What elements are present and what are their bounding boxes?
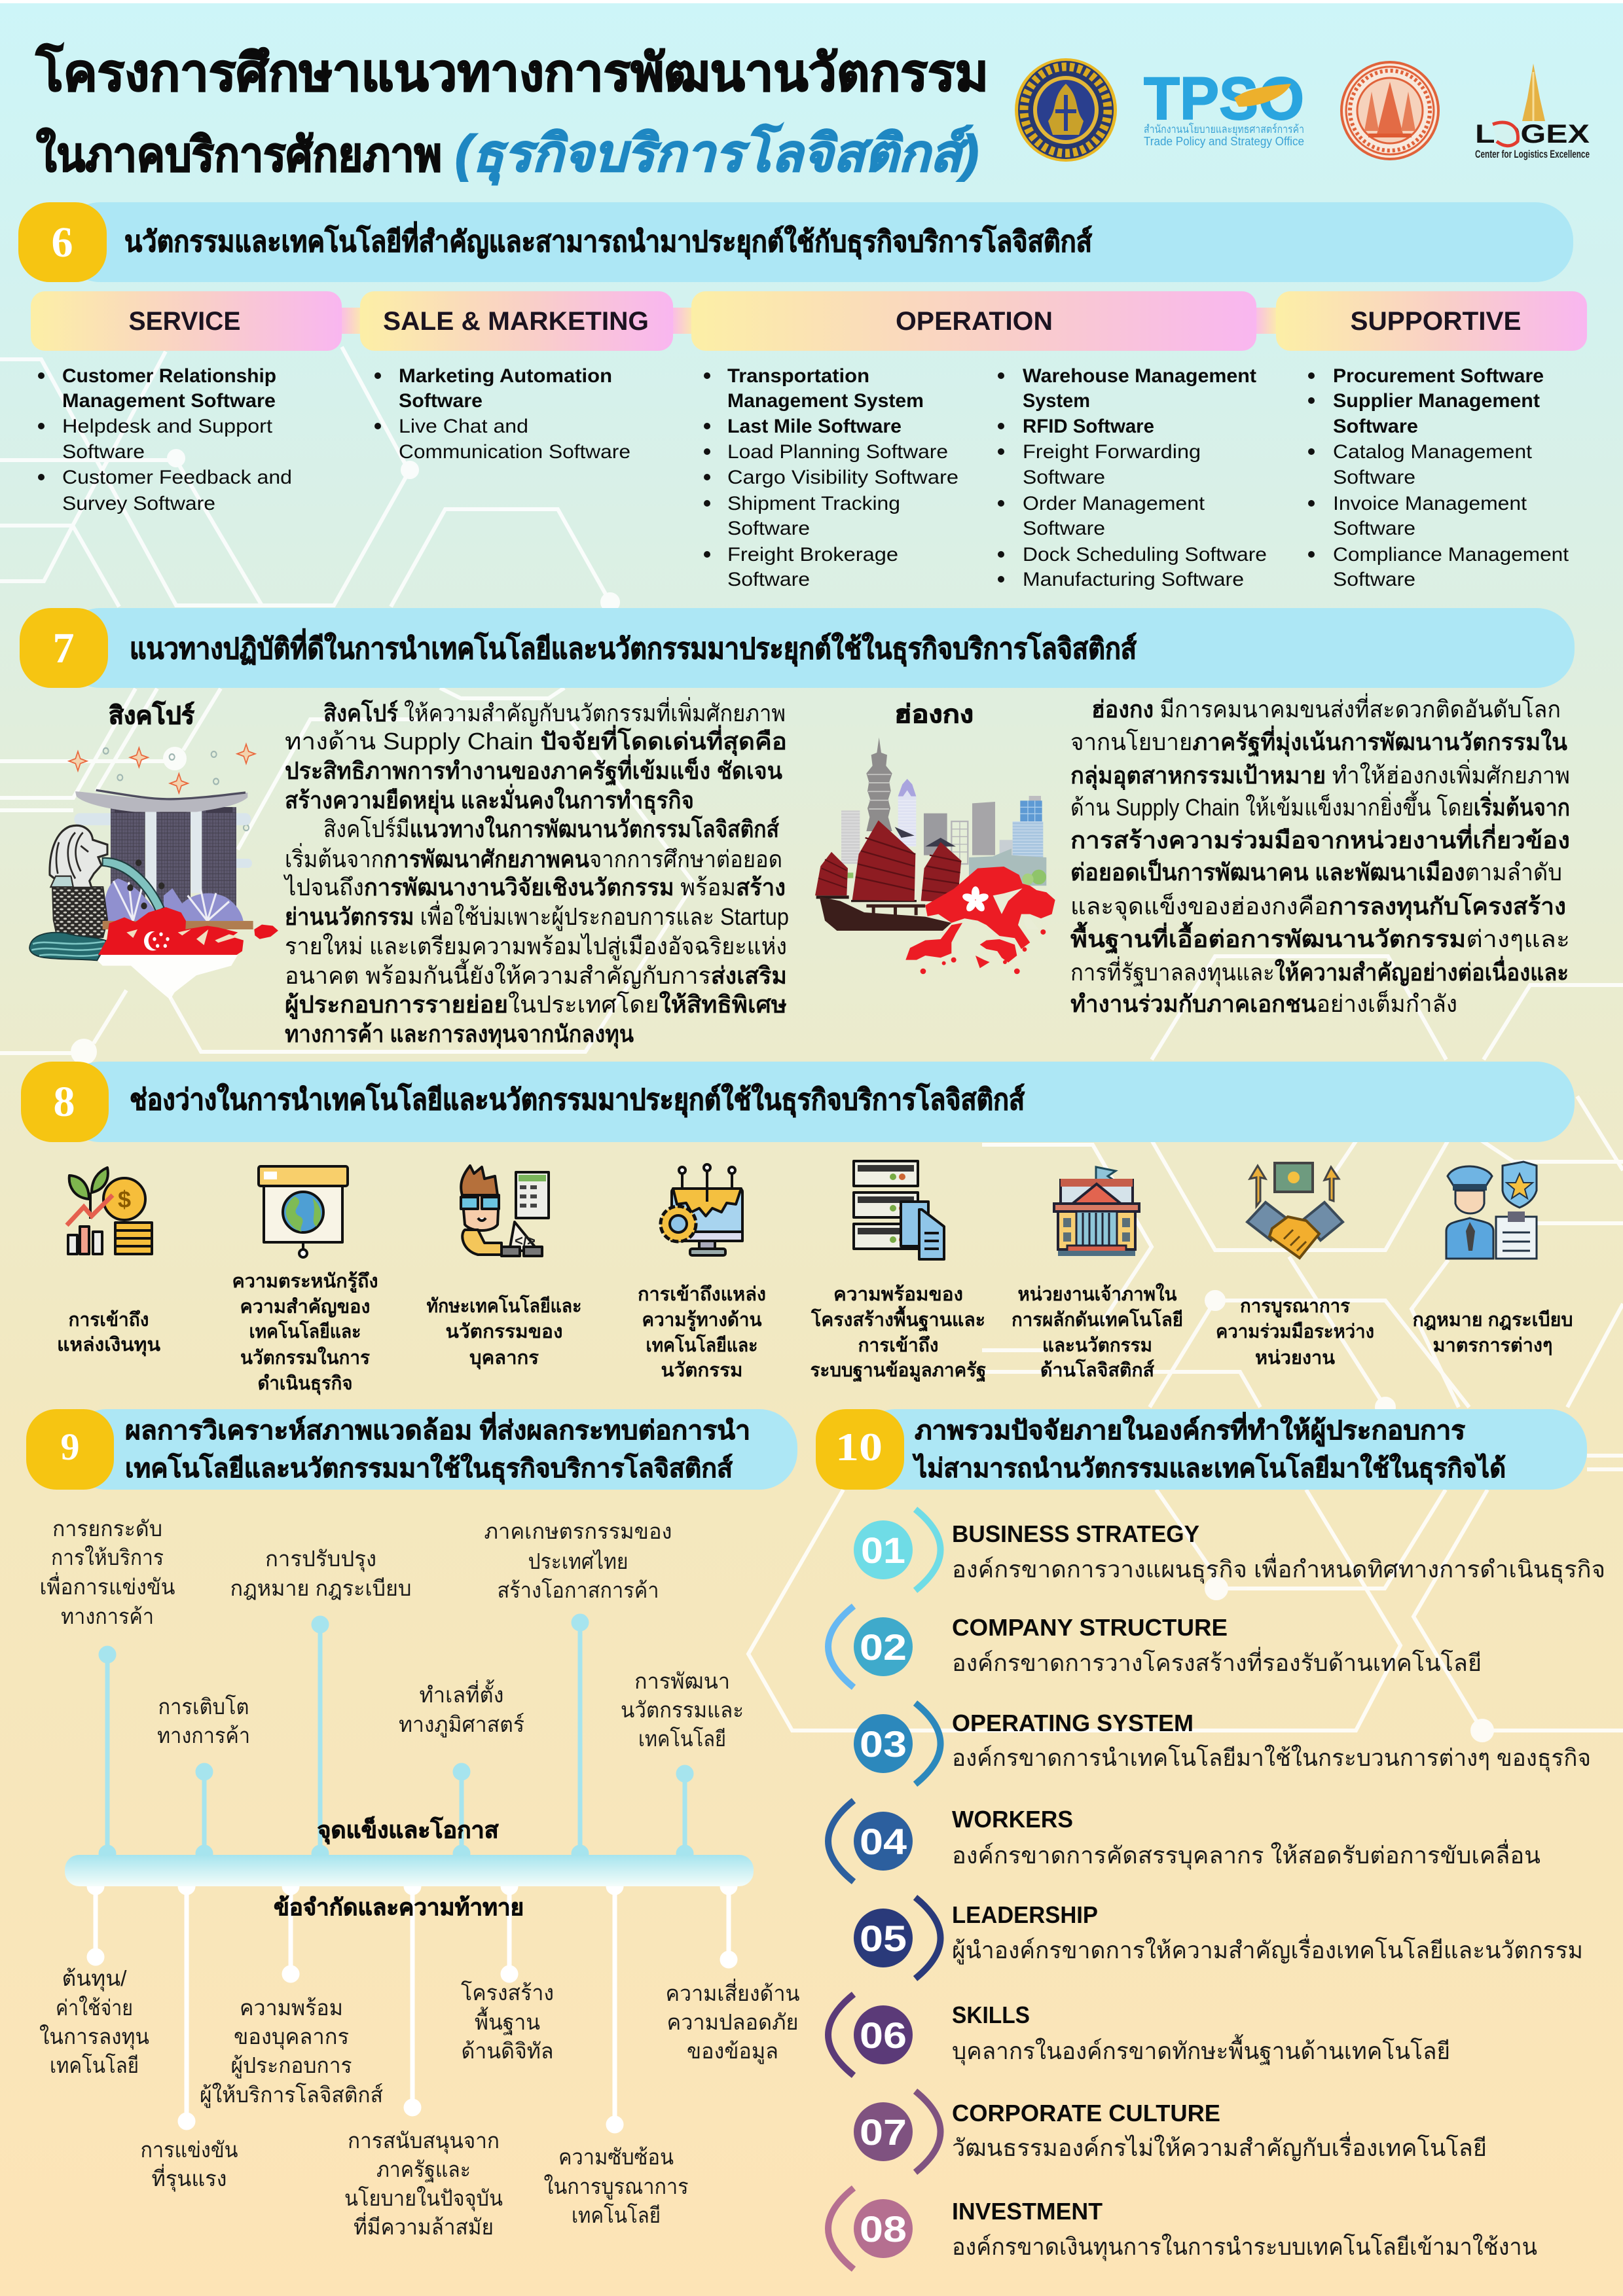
labels: limits and challenges: ความปลอดภัย [666,2010,799,2034]
list: operation software column 1: Management System [727,390,924,412]
label: regulation: กฎหมาย กฎระเบียบ [1413,1310,1573,1331]
logo: LOGEX [1475,63,1590,160]
heading: section 8: ช่องว่างในการนำเทคโนโลยีและนวัตกรรมมาประยุกต์ใช้ในธุรกิจบริการโลจิสติกส์ [130,1082,1025,1118]
item 04: 04 [860,1821,907,1862]
label: host agencies: การผลักดันเทคโนโลยี [1012,1308,1183,1331]
item 07: 07 [860,2111,907,2153]
labels: limits and challenges: ที่มีความล้าสมัย [354,2212,494,2239]
label: integration [1216,1296,1374,1369]
labels: strengths and opportunities [39,1516,744,1751]
labels: limits and challenges: การแข่งขัน [140,2138,238,2162]
labels: limits and challenges: ในการบูรณาการ [543,2174,689,2200]
icon: government building [1054,1167,1139,1256]
icon: officer with clipboard [1446,1162,1537,1259]
list: internal factors [828,1509,1605,2269]
labels: strengths and opportunities: เพื่อการแข่งขัน [39,1572,175,1599]
item 05: ผู้นำองค์กรขาดการให้ความสำคัญเรื่องเทคโนโลยีและนวัตกรรม [952,1934,1583,1965]
text: Singapore [283,697,789,1049]
labels: strengths and opportunities: สร้างโอกาสการค้า [498,1578,659,1602]
label: awareness: ความสำคัญของ [240,1297,371,1318]
item 03: องค์กรขาดการนำเทคโนโลยีมาใช้ในกระบวนการต่างๆ ของธุรกิจ [952,1744,1591,1772]
text: Hong Kong: ด้าน Supply Chain ให้เข้มแข็งมากยิ่งขึ้น โดยเริ่มต้นจาก [1070,790,1570,821]
list: operation software column 2: RFID Software [1023,416,1154,437]
item 03 [854,1703,1591,1784]
text: Hong Kong: และจุดแข็งของฮ่องกงคือ การลงทุนกับโครงสร้าง [1070,891,1566,922]
badge 9: 9 [60,1426,80,1468]
icon: globe presentation [259,1166,348,1257]
timeline stems: strengths [101,1616,691,1860]
logo: ministry seal [1015,58,1117,162]
category: service [31,291,342,351]
label: knowledge: การเข้าถึงแหล่ง [638,1284,766,1305]
item 05 [854,1897,1583,1979]
category: sale and marketing [360,291,673,351]
category: service: SERVICE [128,307,241,336]
label: skills [427,1294,581,1369]
text: Singapore: ย่านนวัตกรรม เพื่อใช้บ่มเพาะผู้ประกอบการและ Startup [285,901,789,931]
timeline bar [65,1855,754,1886]
label: knowledge: นวัตกรรม [661,1360,742,1381]
list: operation software column 1: Software [727,518,810,539]
labels: limits and challenges: เทคโนโลยี [572,2203,661,2227]
text: Singapore: สร้างความยืดหยุ่น และมั่นคงในการทำธุรกิจ [285,783,694,816]
list: sale and marketing software: Marketing Automation [399,365,612,387]
label: regulation [1413,1310,1573,1356]
badge 6: 6 [51,219,73,266]
labels: limits and challenges: ของบุคลากร [234,2024,349,2050]
badge 8 [21,1062,109,1142]
list: supportive software: Software [1333,569,1415,590]
labels: limits and challenges: เทคโนโลยี [50,2053,139,2077]
item 02: COMPANY STRUCTURE [952,1614,1228,1641]
label: awareness: ดำเนินธุรกิจ [258,1373,352,1395]
item 01: 01 [861,1530,905,1571]
category: operation: OPERATION [896,307,1053,336]
heading: section 10: ไม่สามารถนำนวัตกรรมและเทคโนโลยีมาใช้ในธุรกิจได้ [912,1453,1506,1485]
badge 7: 7 [52,624,75,672]
logo: LOGEX: LOGEX [1475,120,1590,149]
badge 6 [18,202,107,282]
title: โครงการศึกษาแนวทางการพัฒนานวัตกรรม [35,43,989,101]
text: Singapore: ผู้ประกอบการรายย่อยในประเทศโดยให้สิทธิพิเศษ [285,990,787,1020]
badge 10 [816,1409,904,1490]
text: Hong Kong: จากนโยบายภาครัฐที่มุ่งเน้นการพัฒนานวัตกรรมใน [1070,725,1567,757]
labels: strengths and opportunities: กฎหมาย กฎระเบียบ [230,1576,411,1600]
list: operation software column 1: Software [727,569,810,590]
labels: technology gaps [57,1271,1573,1395]
label: host agencies: และนวัตกรรม [1042,1335,1152,1356]
heading: section 9 [26,1409,797,1490]
labels: limits and challenges: ผู้ให้บริการโลจิสติกส์ [200,2083,383,2108]
category: operation [691,291,1256,351]
label: awareness: ความตระหนักรู้ถึง [232,1271,378,1293]
list: operation software column 2: Order Management [1023,493,1205,514]
list: operation software column 2: System [1023,390,1090,412]
heading: section 6: นวัตกรรมและเทคโนโลยีที่สำคัญและสามารถนำมาประยุกต์ใช้กับธุรกิจบริการโลจิสติกส์ [124,221,1092,260]
panel: technology categories [31,291,1587,351]
text: Singapore: สิงคโปร์มีแนวทางในการพัฒนานวัตกรรมโลจิสติกส์ [323,815,779,842]
item 06 [828,1994,1450,2075]
label: integration: ความร่วมมือระหว่าง [1216,1321,1374,1342]
item 05: 05 [860,1918,907,1959]
text: Singapore: รายใหม่ และเตรียมความพร้อมไปสู่เมืองอัจฉริยะแห่ง [285,933,787,961]
labels: limits and challenges: ต้นทุน/ [62,1966,127,1992]
list: supportive software: Catalog Management [1333,441,1533,463]
labels: strengths and opportunities: การปรับปรุง [265,1547,376,1572]
text: Singapore: ประสิทธิภาพการทำงานของภาครัฐที่เข้มแข็ง ชัดเจน [285,754,782,786]
list: operation software column 1: Transportation [727,365,869,387]
list: supportive software: Supplier Management [1333,390,1540,412]
labels: limits and challenges: ในการลงทุน [39,2024,149,2050]
list: sale and marketing software: Live Chat and [399,416,528,437]
text: Hong Kong: ต่อยอดเป็นการพัฒนาคน และพัฒนาเมืองตามลำดับ [1070,857,1562,886]
label: skills: นวัตกรรมของ [445,1321,563,1342]
icon: gear and monitor knowledge [661,1164,742,1255]
logo: TPSO: Trade Policy and Strategy Office [1144,135,1304,148]
label: infrastructure [811,1284,986,1382]
title: (ธุรกิจบริการโลจิสติกส์) [455,123,979,185]
labels: limits and challenges: ภาครัฐและ [376,2157,471,2183]
category: supportive [1276,291,1587,351]
item 05: LEADERSHIP [952,1901,1098,1928]
list: supportive software: Software [1333,518,1415,539]
label: skills: ทักษะเทคโนโลยีและ [427,1294,581,1317]
item 01: องค์กรขาดการวางแผนธุรกิจ เพื่อกำหนดทิศทางการดำเนินธุรกิจ [952,1553,1605,1584]
text: Hong Kong: ฮ่องกง มีการคมนาคมขนส่งที่สะดวกติดอันดับโลก [1091,693,1561,723]
connectors [337,308,1279,334]
label: awareness: นวัตกรรมในการ [240,1346,370,1369]
list: service software: Customer Relationship [62,365,276,387]
labels: limits and challenges: ผู้ประกอบการ [230,2053,352,2079]
labels: strengths and opportunities: ภาคเกษตรกรรมของ [484,1519,672,1543]
heading: section 7 [20,608,1575,688]
list: service software: Customer Feedback and [62,467,292,488]
text: Singapore: ทางการค้า และการลงทุนจากนักลงทุน [285,1020,634,1049]
labels: strengths and opportunities: การยกระดับ [52,1516,162,1541]
label: infrastructure: ความพร้อมของ [833,1284,963,1305]
text: Singapore: ไปจนถึงการพัฒนางานวิจัยเชิงนวัตกรรม พร้อมสร้าง [283,874,786,901]
label: knowledge: ความรู้ทางด้าน [642,1310,762,1331]
labels: limits and challenges [39,1966,800,2239]
item 06: 06 [860,2015,907,2056]
list: operation software column 2 [998,365,1267,590]
labels: limits and challenges: ค่าใช้จ่าย [56,1996,133,2020]
text: Hong Kong: พื้นฐานที่เอื้อต่อการพัฒนานวัตกรรม ต่างๆและ [1070,922,1570,954]
list: sale and marketing software [374,365,630,463]
badge 8: 8 [54,1078,75,1126]
labels: limits and challenges: ของข้อมูล [687,2039,778,2064]
list: supportive software: Procurement Software [1333,365,1544,387]
labels: strengths and opportunities: การเติบโต [158,1695,249,1719]
heading: Singapore: สิงคโปร์ [109,700,195,730]
item 06: บุคลากรในองค์กรขาดทักษะพื้นฐานด้านเทคโนโลยี [952,2034,1450,2066]
item 01 [854,1509,1605,1590]
list: operation software column 1: Freight Brokerage [727,544,898,565]
text: Hong Kong: การสร้างความร่วมมือจากหน่วยงานที่เกี่ยวข้อง [1070,823,1570,853]
label: host agencies: หน่วยงานเจ้าภาพใน [1017,1283,1177,1305]
heading: section 8 [21,1062,1575,1142]
timeline stems: challenges [89,1880,735,2131]
list: supportive software [1308,365,1569,590]
heading: section 9: เทคโนโลยีและนวัตกรรมมาใช้ในธุรกิจบริการโลจิสติกส์ [125,1453,733,1485]
item 03: 03 [860,1723,907,1765]
item 08 [828,2188,1537,2269]
heading: section 7: แนวทางปฏิบัติที่ดีในการนำเทคโนโลยีและนวัตกรรมมาประยุกต์ใช้ในธุรกิจบริการโลจิสติกส์ [130,628,1137,667]
text: Singapore: ทางด้าน Supply Chain ปัจจัยที่โดดเด่นที่สุดคือ [285,725,787,757]
labels: strengths and opportunities: ทางการค้า [61,1604,154,1628]
item 04 [828,1801,1541,1882]
item 01: BUSINESS STRATEGY [952,1520,1199,1547]
item 02: 02 [860,1626,907,1668]
label: infrastructure: การเข้าถึง [858,1335,939,1356]
label: integration: หน่วยงาน [1255,1348,1335,1369]
text: Singapore: สิงคโปร์ ให้ความสำคัญกับนวัตกรรมที่เพิ่มศักยภาพ [323,697,786,726]
labels: limits and challenges: ความซับซ้อน [558,2145,674,2169]
labels: limits and challenges: ความเสี่ยงด้าน [665,1979,800,2005]
heading: section 10: ภาพรวมปัจจัยภายในองค์กรที่ทำให้ผู้ประกอบการ [915,1412,1466,1446]
item 02: องค์กรขาดการวางโครงสร้างที่รองรับด้านเทคโนโลยี [952,1647,1482,1676]
item 08: 08 [860,2208,907,2250]
icon: tech-skilled person [461,1166,549,1256]
list: sale and marketing software: Software [399,390,483,412]
list: supportive software: Software [1333,467,1415,488]
labels: limits and challenges: ด้านดิจิทัล [461,2039,554,2063]
text: Singapore: เริ่มต้นจากการพัฒนาศักยภาพคนจากการศึกษาต่อยอด [285,843,782,872]
label: knowledge: เทคโนโลยีและ [646,1333,758,1356]
list: operation software column 2: Warehouse Management [1023,365,1256,387]
label: skills: บุคลากร [469,1348,539,1369]
labels: limits and challenges: พื้นฐาน [475,2007,540,2036]
labels: limits and challenges: นโยบายในปัจจุบัน [344,2186,503,2212]
heading: Hong Kong: ฮ่องกง [894,701,974,728]
item 02 [828,1606,1482,1687]
list: sale and marketing software: Communication Software [399,441,630,463]
labels: strengths and opportunities: การให้บริการ [51,1545,164,1570]
labels: strengths and opportunities: เทคโนโลยี [638,1727,726,1751]
text: Hong Kong: ทำงานร่วมกับภาคเอกชนอย่างเต็มกำลัง [1070,989,1457,1017]
text: Singapore: อนาคต พร้อมกันนี้ยังให้ความสำคัญกับการส่งเสริม [285,958,787,989]
list: operation software column 1 [704,365,958,590]
list: service software: Management Software [62,390,276,412]
list: service software: Survey Software [62,493,215,514]
icon: funding growth [67,1168,152,1254]
list: supportive software: Software [1333,416,1418,437]
label: funding: แหล่งเงินทุน [57,1335,160,1356]
title [35,43,989,185]
label: host agencies [1012,1283,1183,1381]
list: supportive software: Compliance Management [1333,544,1569,565]
axis label: strengths and opportunities: จุดแข็งและโอกาส [317,1816,499,1844]
badge 7 [20,608,108,688]
list: service software: Helpdesk and Support [62,416,273,437]
logo: university seal [1341,62,1438,159]
label: integration: การบูรณาการ [1240,1296,1350,1318]
label: knowledge [638,1284,766,1381]
category: sale and marketing: SALE & MARKETING [383,307,649,336]
list: service software: Software [62,441,145,463]
heading: section 6 [18,202,1573,282]
list: operation software column 2: Software [1023,467,1105,488]
list: service software [38,365,292,514]
label: funding [57,1310,160,1356]
item 08: INVESTMENT [952,2198,1103,2225]
labels: strengths and opportunities: การพัฒนา [634,1669,730,1693]
labels: limits and challenges: การสนับสนุนจาก [348,2128,500,2154]
logo: TPSO: TPSO [1144,65,1304,132]
item 04: WORKERS [952,1806,1073,1833]
labels: limits and challenges: ที่รุนแรง [152,2164,227,2192]
title: ในภาคบริการศักยภาพ [36,127,442,181]
item 08: องค์กรขาดเงินทุนการในการนำระบบเทคโนโลยีเข้ามาใช้งาน [952,2233,1537,2261]
icon: servers and documents [854,1161,944,1259]
label: infrastructure: โครงสร้างพื้นฐานและ [811,1305,985,1332]
list: operation software column 1: Load Planning Software [727,441,948,463]
text: Hong Kong: การที่รัฐบาลลงทุนและให้ความสำคัญอย่างต่อเนื่องและ [1070,956,1569,987]
list: operation software column 1: Last Mile Software [727,416,902,437]
list: operation software column 2: Software [1023,518,1105,539]
label: regulation: มาตรการต่างๆ [1432,1335,1553,1356]
item 03: OPERATING SYSTEM [952,1710,1194,1736]
axis label: limits and challenges: ข้อจำกัดและความท้าทาย [274,1895,524,1920]
icon: handshake cooperation [1247,1163,1343,1258]
list: operation software column 1: Shipment Tracking [727,493,900,514]
labels: strengths and opportunities: นวัตกรรมและ [621,1698,744,1722]
item 07: วัฒนธรรมองค์กรไม่ให้ความสำคัญกับเรื่องเทคโนโลยี [952,2132,1487,2161]
label: infrastructure: ระบบฐานข้อมูลภาครัฐ [811,1360,986,1382]
list: operation software column 1: Cargo Visibility Software [727,467,958,488]
item 04: องค์กรขาดการคัดสรรบุคลากร ให้สอดรับต่อการขับเคลื่อน [952,1839,1541,1870]
badge 10: 10 [835,1426,883,1469]
text: Hong Kong: กลุ่มอุตสาหกรรมเป้าหมาย ทำให้ฮ่องกงเพิ่มศักยภาพ [1070,759,1570,791]
category: supportive: SUPPORTIVE [1350,307,1522,336]
heading: section 10 [816,1409,1587,1490]
list: operation software column 2: Freight Forwarding [1023,441,1201,463]
label: host agencies: ด้านโลจิสติกส์ [1040,1358,1154,1381]
item 07: CORPORATE CULTURE [952,2100,1220,2126]
labels: limits and challenges: โครงสร้าง [461,1981,554,2005]
item 06: SKILLS [952,2001,1030,2028]
illustration: Hong Kong [815,738,1055,974]
label: awareness: เทคโนโลยีและ [249,1319,361,1342]
labels: strengths and opportunities: ทางการค้า [157,1723,250,1748]
labels: strengths and opportunities: ประเทศไทย [528,1549,629,1573]
label: funding: การเข้าถึง [68,1310,149,1331]
text: Hong Kong [1070,693,1570,1017]
icon: funding growth: $ [118,1186,131,1213]
labels: limits and challenges: ความพร้อม [240,1996,343,2020]
icon: tech-skilled person: </> [515,1232,536,1249]
labels: strengths and opportunities: ทำเลที่ตั้ง [419,1679,504,1707]
badge 9 [26,1409,114,1490]
logo: TPSO: สำนักงานนโยบายและยุทธศาสตร์การค้า [1144,122,1304,136]
labels: strengths and opportunities: ทางภูมิศาสตร์ [399,1712,524,1738]
list: supportive software: Invoice Management [1333,493,1527,514]
list: operation software column 2: Manufacturing Software [1023,569,1244,590]
item 07 [854,2091,1487,2172]
chart: environment analysis timeline [39,1516,800,2239]
list: operation software column 2: Dock Scheduling Software [1023,544,1267,565]
illustration: Singapore [29,744,278,999]
label: awareness [232,1271,378,1395]
heading: section 9: ผลการวิเคราะห์สภาพแวดล้อม ที่ส่งผลกระทบต่อการนำ [125,1412,750,1445]
